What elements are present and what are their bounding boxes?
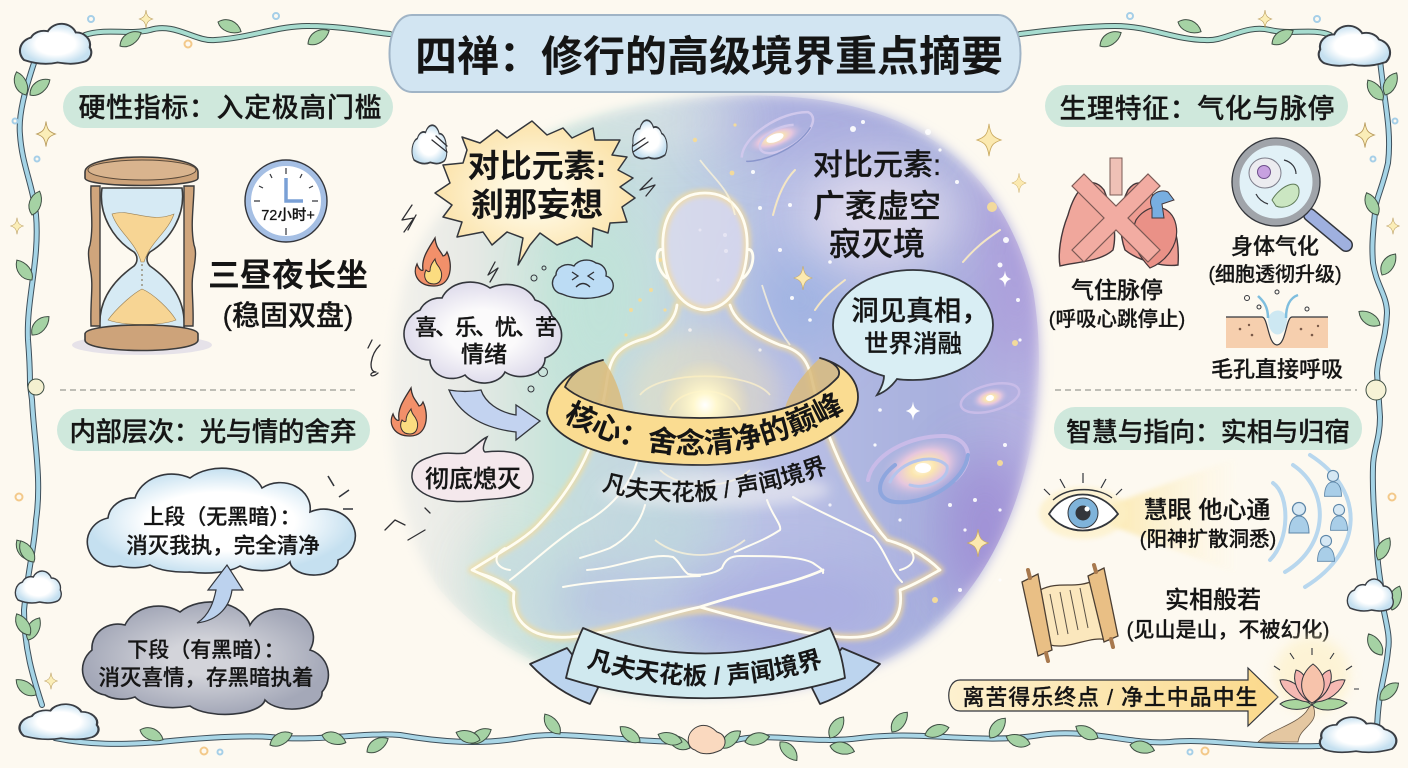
lower dark cloud: 消灭喜情，存黑暗执着 — [98, 666, 314, 690]
bottom ribbon banner — [529, 627, 881, 705]
cloud puffs and zigzags — [368, 120, 667, 540]
speech bubble: 世界消融 — [864, 330, 962, 358]
speech bubble — [833, 270, 993, 395]
divider left — [60, 389, 355, 391]
lotus icon — [1258, 637, 1359, 742]
scroll icon — [1022, 565, 1118, 661]
label: body qi: 身体气化 — [1231, 234, 1319, 259]
bubble: extinguished: 彻底熄灭 — [425, 466, 521, 493]
burst callout: 刹那妄想 — [471, 186, 603, 223]
text: three days sitting — [208, 257, 368, 331]
eye beam and arcs — [1110, 455, 1351, 587]
hourglass icon — [72, 157, 212, 355]
right void text — [813, 149, 941, 262]
label: qi stop: 气住脉停 — [1071, 277, 1163, 303]
emotion cloud — [404, 282, 562, 392]
label: qi stop: (呼吸心跳停止) — [1049, 308, 1185, 331]
heading: hard metric — [63, 86, 393, 128]
label: prajna: 实相般若 — [1165, 587, 1261, 614]
pointing arrow — [949, 668, 1278, 726]
flame icon top — [415, 238, 450, 286]
label: pore: 毛孔直接呼吸 — [1211, 357, 1343, 382]
lower dark cloud: 下段（有黑暗）： — [127, 639, 285, 662]
clock icon: 72小时+ — [261, 207, 315, 224]
right void text: 对比元素: — [813, 149, 941, 182]
divider right — [1055, 389, 1357, 391]
bubble: extinguished — [412, 437, 533, 502]
magnifier icon — [1232, 138, 1346, 245]
upper cloud: 上段（无黑暗）： — [143, 506, 301, 529]
banner label: 凡夫天花板 / 声闻境界 — [586, 648, 822, 687]
title: 四禅：修行的高级境界重点摘要 — [415, 33, 1003, 80]
label: wisdom eye — [1140, 497, 1276, 551]
pointing arrow: 离苦得乐终点 / 净土中品中生 — [962, 685, 1258, 710]
sub label under ring: 凡夫天花板 / 声闻境界 — [602, 455, 826, 503]
galaxy: large lower — [867, 422, 979, 514]
lungs and heart icon — [1059, 158, 1178, 268]
label: body qi: (细胞透彻升级) — [1208, 263, 1342, 286]
angry cloud — [531, 260, 613, 298]
heading: physiology — [1045, 85, 1348, 127]
pore icon — [1226, 290, 1328, 348]
flame icon bottom — [391, 388, 426, 436]
eye icon — [1039, 473, 1127, 539]
label: wisdom eye: 慧眼 他心通 — [1144, 497, 1270, 524]
label: wisdom eye: (阳神扩散洞悉) — [1140, 528, 1276, 551]
right void text: 广袤虚空 — [813, 188, 941, 224]
right void text: 寂灭境 — [829, 226, 925, 262]
burst callout: 对比元素: — [468, 148, 606, 184]
sparkles — [794, 124, 1026, 557]
comet streaks — [773, 170, 1000, 310]
blue arrow — [449, 390, 540, 440]
heading: hard metric: 硬性指标：入定极高门槛 — [78, 93, 382, 123]
burst callout — [435, 121, 635, 265]
heading: wisdom: 智慧与指向：实相与归宿 — [1066, 417, 1350, 447]
title — [390, 15, 1020, 92]
speech bubble: 洞见真相， — [851, 295, 989, 326]
people icons — [1289, 470, 1348, 561]
meditating light figure — [472, 160, 940, 637]
heading: wisdom — [1054, 407, 1362, 450]
label: prajna — [1126, 587, 1330, 642]
text: three days sitting: 三昼夜长坐 — [208, 257, 368, 293]
label: qi stop — [1049, 277, 1185, 331]
core ring band — [546, 357, 859, 466]
heading: physiology: 生理特征：气化与脉停 — [1060, 94, 1334, 124]
core ring label: 核心：舍念清净的巅峰 — [566, 392, 844, 456]
emotion cloud: 喜、乐、忧、苦 — [415, 315, 557, 340]
text: three days sitting: (稳固双盘) — [223, 300, 353, 331]
upper cloud: 消灭我执，完全清净 — [126, 534, 320, 558]
emotion cloud: 情绪 — [461, 341, 507, 367]
label: body qi — [1208, 234, 1342, 286]
upper cloud — [87, 468, 355, 575]
heading: inner levels — [57, 409, 370, 451]
star dust — [688, 120, 1022, 592]
clock icon — [245, 160, 327, 242]
heading: inner levels: 内部层次：光与情的舍弃 — [70, 417, 356, 447]
central cosmic nebula — [390, 95, 1050, 695]
lower dark cloud — [83, 602, 328, 714]
up arrow — [197, 565, 243, 623]
label: prajna: (见山是山，不被幻化) — [1126, 619, 1330, 642]
galaxy: small right — [958, 378, 1022, 418]
galaxy: top — [734, 108, 820, 166]
